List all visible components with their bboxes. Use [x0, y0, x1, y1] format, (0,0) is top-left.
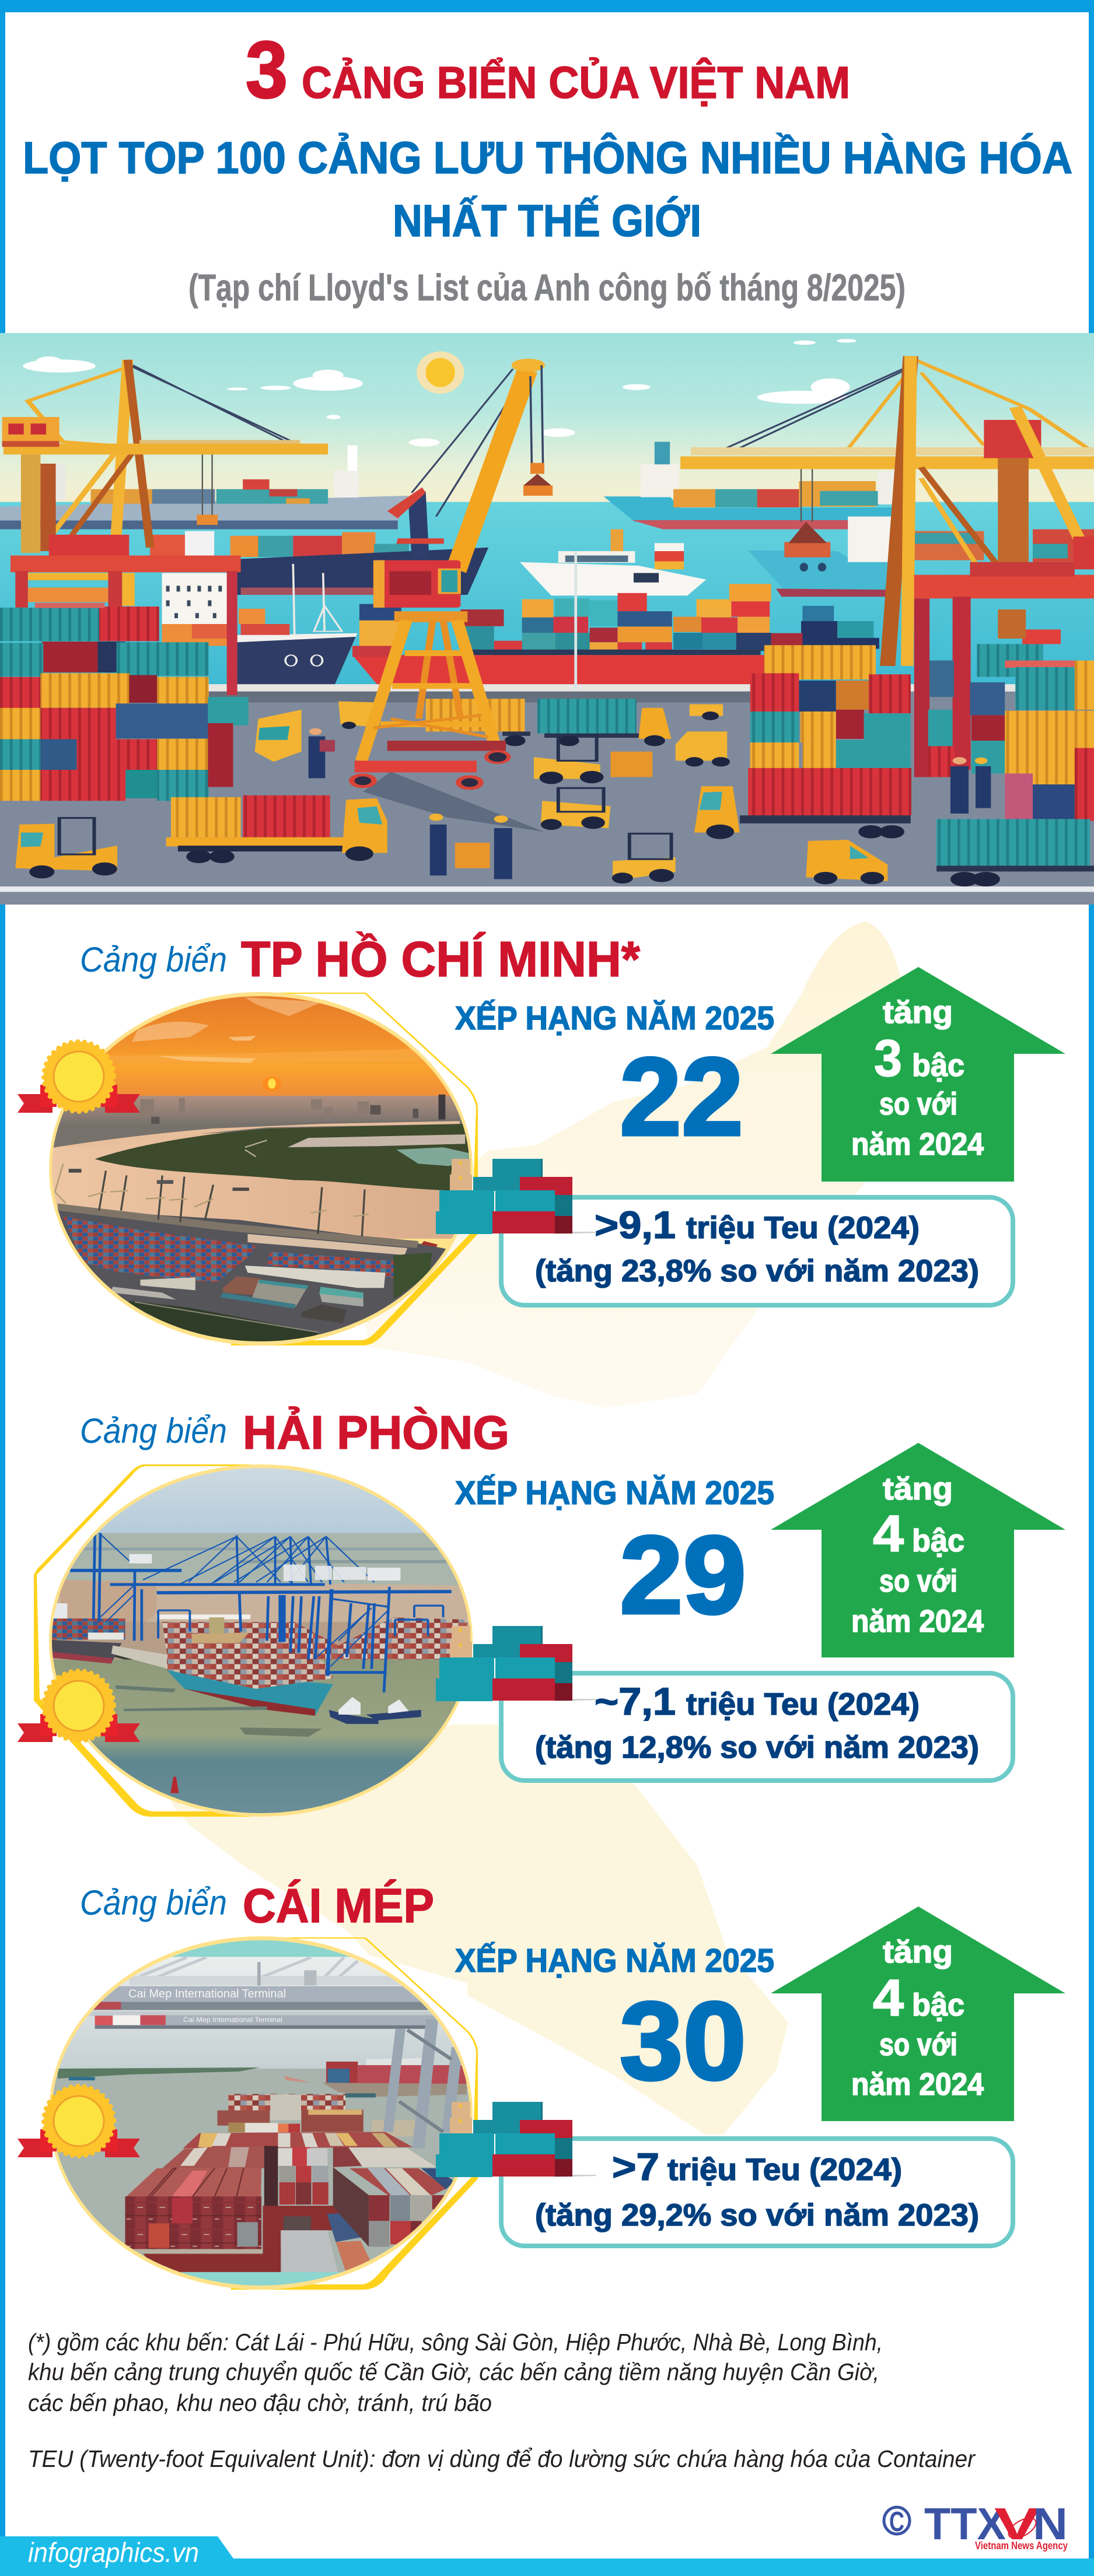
left container stacks	[0, 603, 249, 801]
logo: TTXVN: C	[889, 2507, 904, 2538]
heading: TP Ho Chi Minh	[80, 931, 640, 987]
containers icon	[436, 1626, 596, 1701]
green arrow: up 3 places: năm 2024	[851, 1127, 984, 1162]
left red gantry	[11, 535, 241, 695]
callout: throughput: triệu Teu (2024)	[686, 1687, 920, 1722]
green arrow: up 3 places: bậc	[912, 1048, 964, 1083]
green arrow: up 4 places: bậc	[912, 1523, 964, 1558]
green arrow: up 4 places: tăng	[883, 1471, 953, 1506]
callout: throughput: triệu Teu (2024)	[686, 1211, 920, 1245]
photo: Hai Phong port with blue cranes	[47, 1464, 478, 1828]
callout: throughput: >9,1	[595, 1203, 676, 1246]
medal	[18, 1042, 140, 1113]
footnotes: khu bến cảng trung chuyển quốc tế Cần Giờ, các bến cảng tiềm năng huyện Cần Giờ,	[28, 2358, 879, 2385]
green arrow: up 4 places: năm 2024	[851, 1604, 984, 1639]
decorative pale map shape, lower	[170, 1725, 788, 2135]
heading: Cai Mep	[80, 1878, 434, 1933]
rank number 29: 29	[620, 1513, 746, 1637]
heading: Hai Phong	[80, 1406, 509, 1459]
left yellow crane	[2, 360, 328, 556]
section 2: Hai Phong port	[18, 1406, 1065, 1828]
callout: throughput	[501, 1197, 1013, 1305]
front trucks and forklifts	[15, 768, 1094, 886]
callout: throughput: triệu Teu (2024)	[667, 2153, 902, 2187]
heading: Hai Phong: HẢI PHÒNG	[243, 1406, 509, 1459]
title	[23, 25, 1072, 246]
right gantry and stacks	[750, 562, 1094, 821]
heading: Cai Mep: Cảng biển	[80, 1883, 227, 1922]
green arrow: up 4 places: so với	[879, 1564, 957, 1599]
heading: Hai Phong: Cảng biển	[80, 1411, 227, 1450]
green arrow: up 4 places: tăng	[883, 1934, 953, 1969]
footnotes: TEU (Twenty-foot Equivalent Unit): đơn vị dùng để đo lường sức chứa hàng hóa của Container	[28, 2445, 976, 2472]
logo: TTXVN: N	[1033, 2499, 1068, 2549]
heading: Cai Mep: CÁI MÉP	[243, 1878, 434, 1933]
green arrow: up 4 places: năm 2024	[851, 2067, 984, 2102]
section 1: Ho Chi Minh City port	[18, 931, 1065, 1353]
green arrow: up 4 places	[771, 1443, 1065, 1657]
green arrow: up 4 places: 4	[873, 1968, 904, 2027]
rank number 22: 22	[620, 1035, 743, 1159]
footnotes	[28, 2329, 976, 2472]
callout: throughput: (tăng 23,8% so với năm 2023)	[535, 1254, 979, 1288]
containers icon	[436, 2102, 596, 2177]
right yellow crane	[680, 356, 1094, 666]
ground vehicles mid row	[255, 699, 730, 784]
logo: TTXVN: V	[994, 2499, 1040, 2549]
footnotes: (*) gồm các khu bến: Cát Lái - Phú Hữu, sông Sài Gòn, Hiệp Phước, Nhà Bè, Long Bình,	[28, 2329, 883, 2356]
green arrow: up 3 places	[771, 967, 1065, 1182]
green arrow: up 4 places: bậc	[912, 1988, 964, 2023]
logo: TTXVN: Vietnam News Agency	[975, 2540, 1068, 2552]
green arrow: up 4 places: 4	[873, 1504, 904, 1562]
hero illustration: port scene	[0, 332, 1094, 906]
ground shadow under center crane	[363, 772, 544, 832]
yellow photo frame	[231, 993, 478, 1345]
callout: throughput: (tăng 29,2% so với năm 2023)	[535, 2198, 979, 2232]
photo: Ho Chi Minh port at sunset	[47, 992, 478, 1353]
decorative pale map shape, upper	[350, 921, 903, 1408]
footnotes: các bến phao, khu neo đậu chờ, tránh, trú bão	[28, 2389, 492, 2416]
title: 3	[246, 25, 288, 115]
title: CẢNG BIỂN CỦA VIỆT NAM	[302, 57, 850, 108]
workers	[309, 728, 991, 879]
callout: throughput: ~7,1	[595, 1680, 676, 1723]
green arrow: up 3 places: 3	[874, 1029, 902, 1087]
green arrow: up 4 places	[771, 1906, 1065, 2121]
subtitle: (Tạp chí Lloyd's List của Anh công bố tháng 8/2025)	[188, 267, 906, 309]
green arrow: up 3 places: tăng	[883, 995, 953, 1030]
callout: throughput: >7	[612, 2145, 659, 2188]
yellow photo frame	[34, 1464, 251, 1817]
yellow photo frame	[231, 1937, 478, 2290]
medal	[18, 1671, 140, 1742]
green arrow: up 3 places: so với	[879, 1087, 957, 1121]
medal	[18, 2086, 140, 2157]
rank label: XẾP HẠNG NĂM 2025	[455, 999, 774, 1037]
rank number 30: 30	[620, 1979, 746, 2103]
logo: TTXVN	[884, 2499, 1068, 2552]
rank label: XẾP HẠNG NĂM 2025	[455, 1941, 774, 1979]
callout: throughput	[501, 2139, 1013, 2246]
callout: throughput	[501, 1673, 1013, 1781]
photo: Cai Mep terminal with container ship: Cai Mep International Terminal	[128, 1988, 286, 2000]
photo: Cai Mep terminal with container ship: Cai Mep International Terminal	[183, 2016, 282, 2024]
callout: throughput: (tăng 12,8% so với năm 2023)	[535, 1730, 979, 1765]
heading: TP Ho Chi Minh: Cảng biển	[80, 940, 227, 979]
rank label: XẾP HẠNG NĂM 2025	[455, 1474, 774, 1512]
section 3: Cai Mep port	[18, 1878, 1065, 2290]
footer band: infographics.vn	[28, 2537, 199, 2568]
green arrow: up 4 places: so với	[879, 2027, 957, 2062]
photo: Cai Mep terminal with container ship	[47, 1936, 478, 2290]
center crane	[352, 359, 553, 788]
logo: TTXVN: TTX	[924, 2499, 1006, 2549]
heading: TP Ho Chi Minh: TP HỒ CHÍ MINH*	[241, 931, 640, 987]
footer band	[0, 2536, 1094, 2576]
title: NHẤT THẾ GIỚI	[393, 195, 701, 246]
containers icon	[436, 1159, 596, 1234]
